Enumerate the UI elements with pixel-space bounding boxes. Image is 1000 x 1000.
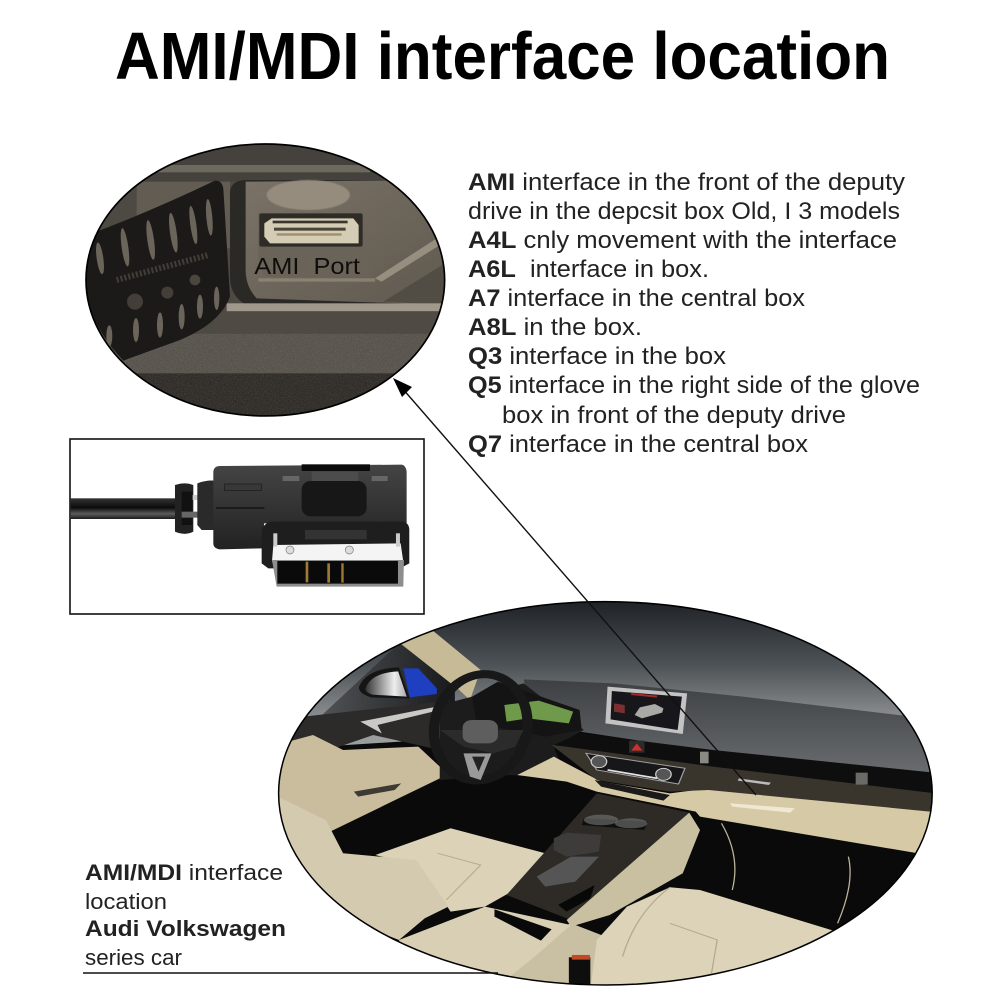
port label: AMI Port xyxy=(254,253,361,279)
arrow: from glovebox to AMI port xyxy=(393,378,756,795)
instrument cluster xyxy=(472,682,582,737)
panel: connector photo xyxy=(70,439,424,614)
panel: car interior photo xyxy=(270,590,945,990)
pillar xyxy=(398,629,481,700)
climate panel xyxy=(586,753,685,784)
text block: interface location by model: box in front of the deputy drive xyxy=(502,402,846,429)
text block: interface location by model xyxy=(468,169,920,458)
title: AMI/MDI interface location xyxy=(115,19,890,94)
text block: interface location by model: A8L in the box. xyxy=(468,314,642,341)
text block: interface location by model: AMI interface in the front of the deputy xyxy=(468,169,905,196)
caption: applicable cars: series car xyxy=(85,945,182,970)
infotainment screen xyxy=(605,687,687,734)
vent band xyxy=(554,739,932,793)
icon: wing mirror xyxy=(359,667,437,699)
text block: interface location by model: Q7 interface in the central box xyxy=(468,431,808,458)
text block: interface location by model: A4L cnly movement with the interface xyxy=(468,227,897,254)
behind wheel trim xyxy=(440,683,584,780)
caption: applicable cars xyxy=(83,860,498,973)
armrest xyxy=(399,907,605,990)
icon: AMI connector xyxy=(71,464,409,587)
console side trim xyxy=(567,813,700,927)
seat belt buckle xyxy=(569,955,590,987)
door xyxy=(270,702,440,832)
center console xyxy=(506,793,689,920)
dashboard top xyxy=(524,679,941,775)
text block: interface location by model: drive in the depcsit box Old, I 3 models xyxy=(468,198,900,225)
caption: applicable cars: Audi Volkswagen xyxy=(85,916,286,941)
caption: applicable cars: AMI/MDI interface xyxy=(85,860,283,885)
side window xyxy=(322,644,455,714)
right seat xyxy=(590,887,833,990)
panel: AMI port photo xyxy=(85,143,446,417)
wood trim xyxy=(552,745,941,813)
text block: interface location by model: A7 interface in the central box xyxy=(468,285,805,312)
left seat cushion xyxy=(375,828,545,912)
lower cabin base xyxy=(332,732,916,942)
text block: interface location by model: A6L interface in box. xyxy=(468,256,709,283)
hazard button xyxy=(629,741,645,753)
left seat bolster xyxy=(270,795,448,940)
glovebox and lower dash xyxy=(517,757,941,855)
steering wheel xyxy=(427,671,534,784)
icon: port socket xyxy=(264,218,359,243)
caption: applicable cars: location xyxy=(85,889,167,914)
text block: interface location by model: Q3 interface in the box xyxy=(468,343,726,370)
text block: interface location by model: Q5 interface in the right side of the glove xyxy=(468,372,920,399)
rubber flap xyxy=(83,181,230,361)
